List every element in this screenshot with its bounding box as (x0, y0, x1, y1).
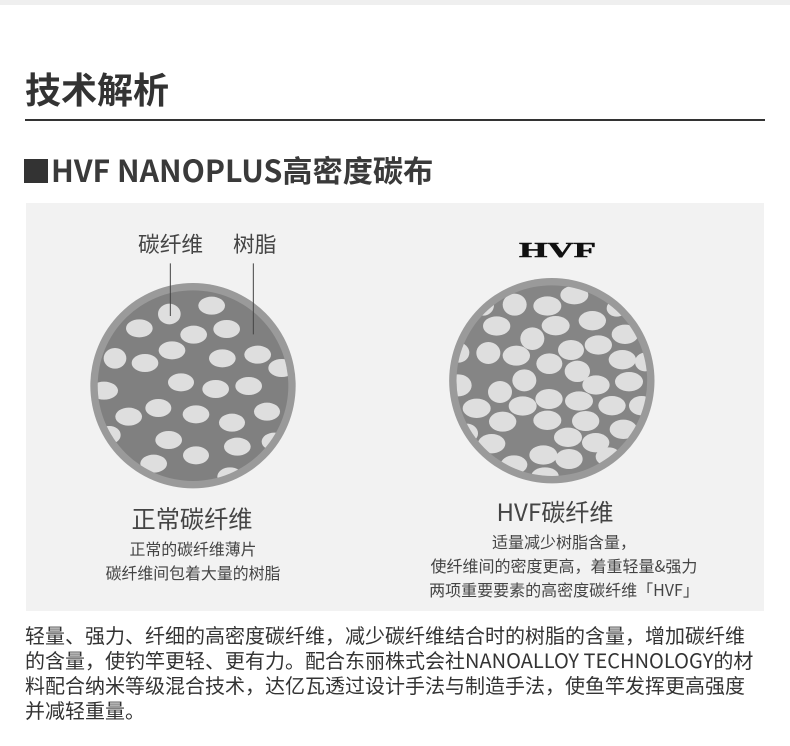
chart: HVF carbon fibre cross-section (449, 278, 654, 484)
body text (25, 620, 753, 724)
label: carbon fibre: 碳纤维 (138, 228, 203, 259)
heading text: HVF NANOPLUS高密度碳布 (51, 147, 433, 191)
caption body: 两项重要要素的高密度碳纤维「HVF」 (429, 577, 699, 601)
caption: normal carbon fibre (106, 500, 280, 584)
caption: HVF carbon fibre (429, 493, 699, 601)
caption heading: HVF碳纤维 (496, 493, 613, 528)
body text: 并减轻重量。 (25, 695, 145, 724)
panel: carbon fibre comparison (26, 203, 764, 611)
body text: 的含量，使钓竿更轻、更有力。配合东丽株式会社NANOALLOY TECHNOLOGY的材 (25, 645, 753, 674)
body text: 轻量、强力、纤细的高密度碳纤维，减少碳纤维结合时的树脂的含量，增加碳纤维 (25, 620, 745, 649)
caption body: 正常的碳纤维薄片 (129, 537, 257, 560)
caption body: 适量减少树脂含量， (492, 529, 636, 553)
icon: heading square (24, 159, 48, 183)
body text: 料配合纳米等级混合技术，达亿瓦透过设计手法与制造手法，使鱼竿发挥更高强度 (25, 670, 745, 699)
caption body: 碳纤维间包着大量的树脂 (106, 561, 280, 584)
logo: HVF: HVF (519, 238, 596, 262)
label: resin: 树脂 (233, 228, 276, 259)
caption body (429, 529, 699, 601)
section heading (24, 147, 433, 191)
title: 技术解析 (25, 62, 169, 114)
chart: normal carbon fibre cross-section (90, 263, 296, 488)
caption heading: 正常碳纤维 (132, 500, 252, 535)
caption body: 使纤维间的密度更高，着重轻量&强力 (431, 553, 697, 577)
caption body (106, 537, 280, 584)
